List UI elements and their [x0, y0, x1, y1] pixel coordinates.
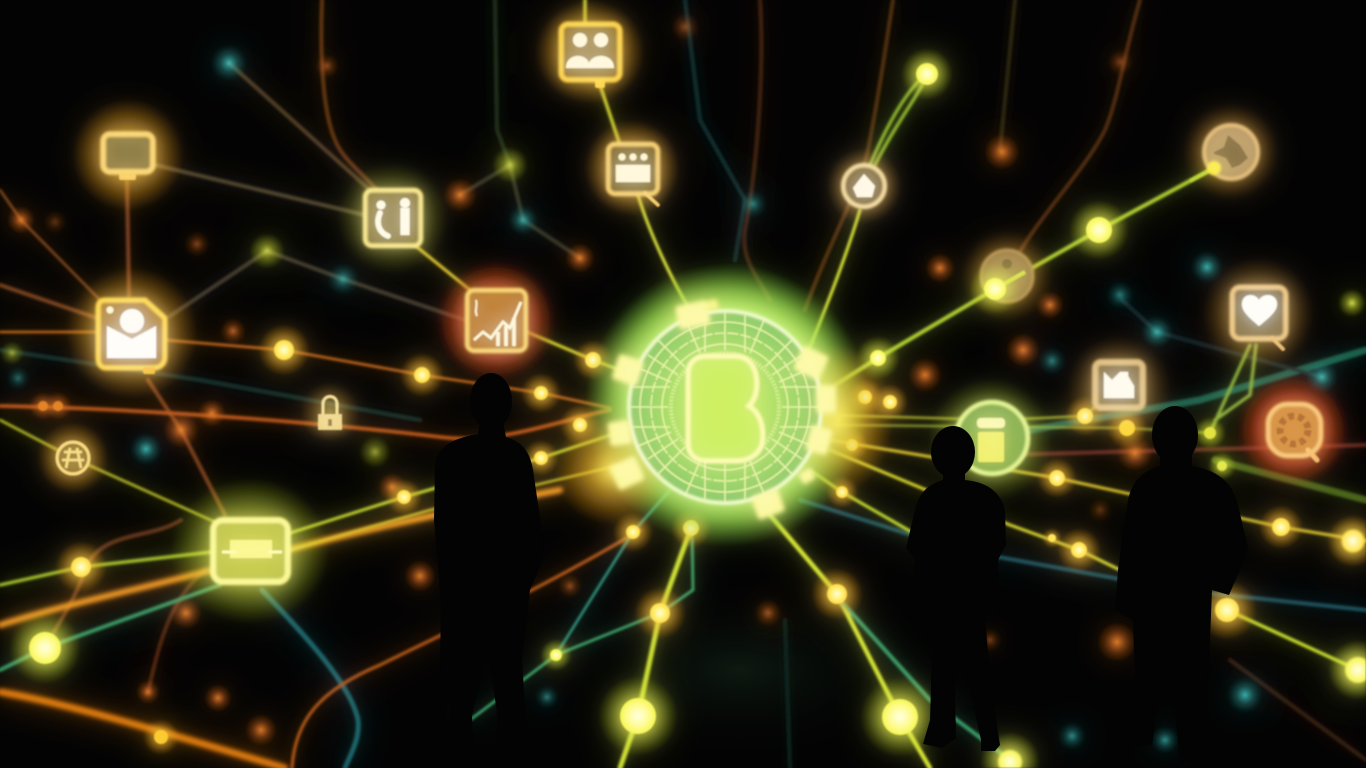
silhouette: middle man	[906, 426, 1006, 751]
letter B shape	[688, 356, 763, 461]
icon: video slate	[584, 120, 680, 216]
icon: settings dial	[37, 422, 109, 494]
icon: image card	[1067, 336, 1171, 440]
icon: group chat	[535, 0, 645, 104]
icon: people call	[337, 162, 449, 274]
icon: lock	[300, 382, 360, 442]
icon: heart card	[1202, 258, 1314, 370]
hub connector tabs	[607, 299, 836, 520]
central hub: glow	[554, 263, 893, 547]
icon: social bubble on circle	[826, 148, 902, 224]
central hub: globe with letter B	[629, 311, 821, 503]
globe grid lines	[630, 312, 820, 502]
icon: yellow-green message box	[170, 478, 330, 624]
icon: green ring behind figure	[928, 378, 1052, 502]
dim green nodes	[0, 147, 1366, 468]
silhouette: left man	[434, 373, 549, 760]
icon: red wheel search	[1237, 374, 1349, 486]
icon: growth chart	[436, 261, 556, 381]
icon: faded circle	[961, 230, 1053, 322]
icon: mail with person	[66, 267, 198, 399]
icon: puzzle circle	[1183, 104, 1279, 200]
silhouette: right man	[1105, 406, 1248, 762]
bright orange bands	[0, 332, 640, 768]
icon: monitor	[72, 99, 184, 211]
